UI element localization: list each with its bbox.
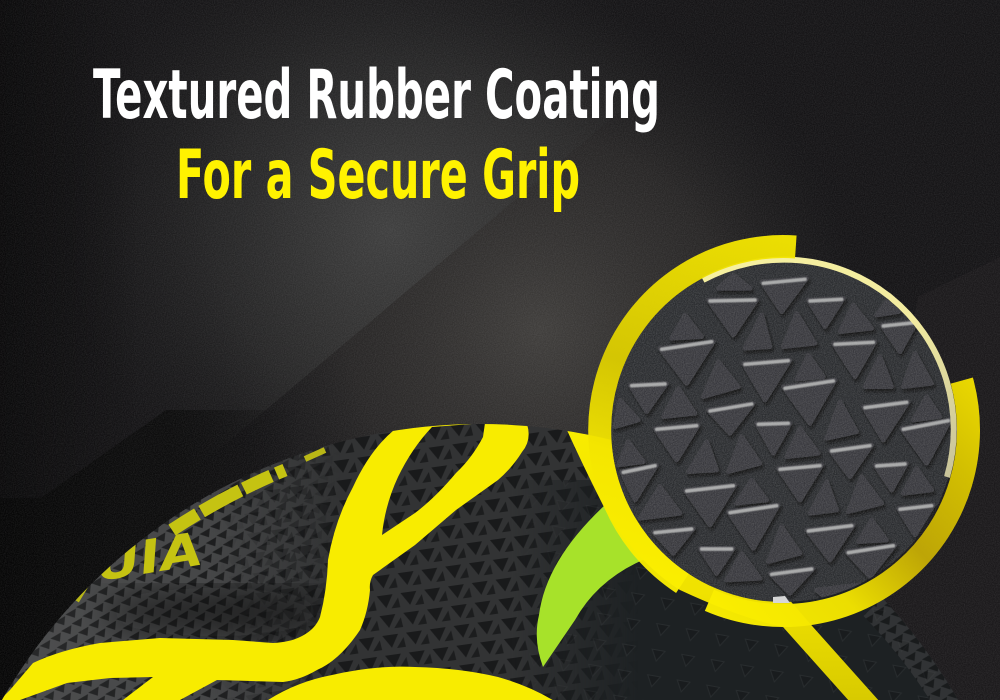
lens ring: left arc (600, 247, 796, 583)
ball logo: faded letters: UIA (91, 522, 206, 592)
title (93, 56, 660, 215)
lens ring: pale inner arc (703, 260, 954, 477)
yellow seam: lower dome (265, 667, 556, 700)
ball (2, 424, 958, 700)
lens texture: triangles (611, 258, 955, 607)
heading: yellow line: For a Secure Grip (176, 136, 580, 215)
ball logo: faded letters (75, 450, 325, 600)
zoom lens: rubber texture close-up (600, 247, 969, 616)
green leaf panel (536, 506, 643, 667)
lens ring: bottom-right arc (709, 381, 969, 616)
lens chip: white mark (773, 596, 790, 603)
lens disc (611, 258, 955, 602)
yellow seam: main curving band (0, 423, 529, 700)
yellow seam: right band (566, 428, 880, 700)
